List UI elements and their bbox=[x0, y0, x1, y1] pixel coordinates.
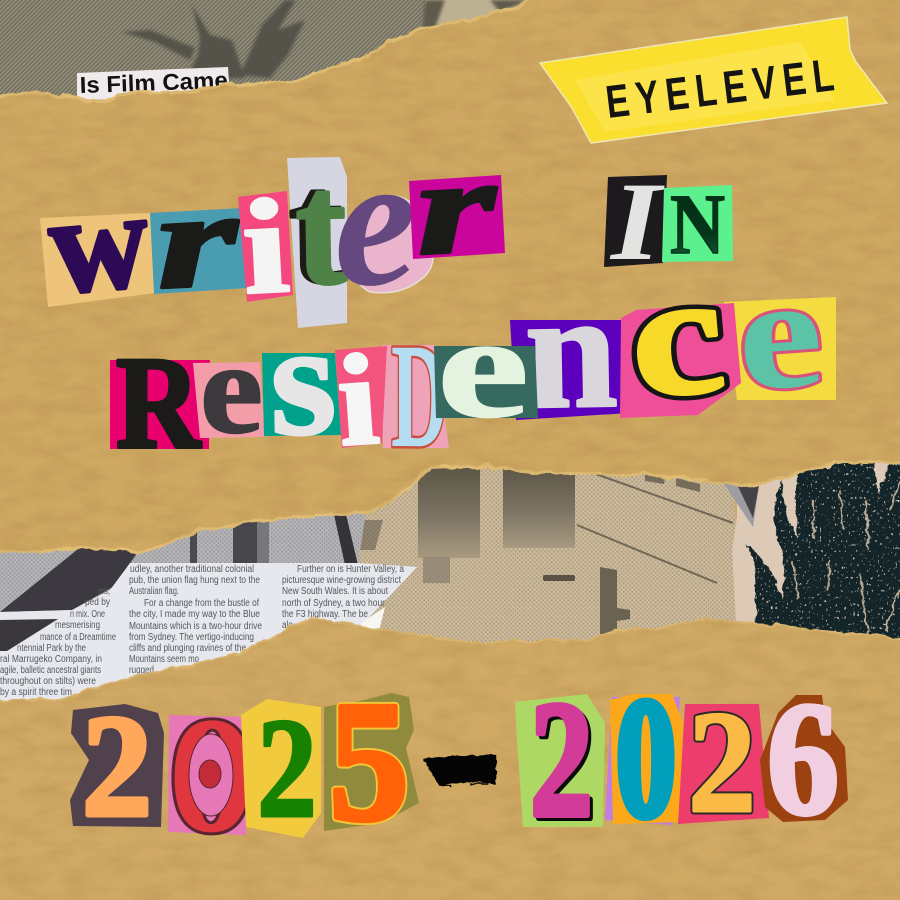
article column three: Further on is Hunter Valley, a bbox=[297, 564, 404, 575]
article column one: ped by bbox=[85, 597, 110, 608]
torn kraft paper: lower sheet bbox=[0, 618, 900, 900]
letter e bbox=[434, 286, 538, 448]
letter D bbox=[382, 313, 449, 479]
article column two: cliffs and plunging ravines of the bbox=[129, 643, 246, 654]
digit 2 magenta: 2 bbox=[530, 667, 593, 851]
letter t: t bbox=[288, 138, 345, 317]
article column one: agile, balletic ancestral giants bbox=[0, 665, 101, 676]
letter n: n bbox=[523, 257, 619, 443]
article column two: udley, another traditional colonial bbox=[130, 564, 254, 575]
article column two: For a change from the bustle of bbox=[144, 598, 259, 609]
digit 2 dark: 2 bbox=[82, 685, 152, 847]
icon: dark plant leaves bbox=[747, 455, 900, 650]
article column three: New South Wales. It is about bbox=[282, 586, 388, 597]
article column one bbox=[0, 586, 116, 698]
grey photo corner bbox=[720, 478, 760, 527]
letter e final: e bbox=[731, 241, 828, 425]
heading word: In bbox=[604, 160, 733, 284]
top photo collage bbox=[0, 0, 560, 110]
letter c: c bbox=[623, 238, 731, 435]
article column two: rugged bbox=[129, 665, 154, 676]
digit 0 blue: 0 bbox=[616, 664, 676, 852]
grey photo left bbox=[0, 505, 367, 614]
article column one: mesmerising bbox=[55, 620, 100, 631]
article column two bbox=[129, 564, 262, 676]
digit 2 magenta: 2 bbox=[533, 670, 596, 854]
digit 6: 6 bbox=[767, 670, 839, 849]
letter c: c bbox=[623, 238, 731, 435]
article column one: mance of a Dreamtime bbox=[40, 632, 116, 643]
article column one: n mix. One bbox=[70, 609, 105, 620]
magazine text page bbox=[0, 563, 417, 710]
letter i: i bbox=[239, 172, 293, 323]
middle torn gap collage bbox=[0, 455, 900, 710]
digit 2 amber: 2 bbox=[688, 681, 756, 843]
article column two: Australian flag. bbox=[129, 586, 179, 597]
article column one: ies, bbox=[98, 586, 110, 597]
digit 2 green: 2 bbox=[257, 689, 317, 847]
building photo bbox=[340, 464, 742, 650]
torn kraft paper: upper sheet bbox=[0, 0, 900, 553]
letter r bbox=[409, 131, 505, 283]
letter i: i bbox=[333, 327, 383, 474]
digit 2 amber: 2 bbox=[688, 681, 756, 843]
digit 0 pink: 0 bbox=[166, 682, 258, 868]
article column three bbox=[282, 564, 404, 631]
letter s: s bbox=[269, 290, 338, 469]
article column one: by a spirit three tim bbox=[0, 687, 72, 698]
brush stroke dash bbox=[423, 755, 495, 787]
article column two: the city, I made my way to the Blue bbox=[129, 609, 260, 620]
letter r: r bbox=[152, 164, 243, 318]
letter w: w bbox=[43, 162, 154, 323]
letter t: t bbox=[295, 139, 348, 318]
letter r bbox=[150, 164, 248, 318]
letter N: N bbox=[670, 176, 725, 272]
letter r: r bbox=[412, 131, 502, 283]
article column two: Mountains seem mo bbox=[129, 654, 199, 665]
article column two: Mountains which is a two-hour drive bbox=[129, 621, 262, 632]
article column three: north of Sydney, a two hour bbox=[282, 598, 386, 609]
digit 5: 5 bbox=[329, 667, 409, 857]
newspaper clipping: Is Film Came: Is Film Came bbox=[79, 67, 228, 98]
article column three: alo bbox=[282, 620, 293, 631]
tape label: EYELEVEL bbox=[540, 17, 887, 143]
digit 0 blue bbox=[605, 664, 683, 852]
heading word: Residence bbox=[110, 238, 836, 479]
article column one: throughout on stilts) were bbox=[0, 676, 96, 687]
plant panel bbox=[720, 455, 900, 650]
article column three: picturesque wine-growing district bbox=[282, 575, 401, 586]
letter R: R bbox=[116, 329, 201, 476]
article column two: pub, the union flag hung next to the bbox=[129, 575, 260, 586]
heading word: Writer bbox=[40, 114, 505, 328]
article column one: ntennial Park by the bbox=[17, 643, 86, 654]
letter D: D bbox=[391, 313, 448, 479]
icon: palm shadow bbox=[122, 0, 305, 80]
article column three: the F3 highway. The be bbox=[282, 609, 368, 620]
letter e: e bbox=[327, 114, 422, 327]
article column two: from Sydney. The vertigo-inducing bbox=[129, 632, 254, 643]
year range: 2025-2026 bbox=[70, 664, 848, 868]
article column one: ral Marrugeko Company, in bbox=[0, 654, 102, 665]
letter I: I bbox=[609, 160, 665, 284]
letter e: e bbox=[200, 317, 263, 461]
digit 5: 5 bbox=[329, 667, 409, 857]
letter e: e bbox=[437, 286, 529, 448]
